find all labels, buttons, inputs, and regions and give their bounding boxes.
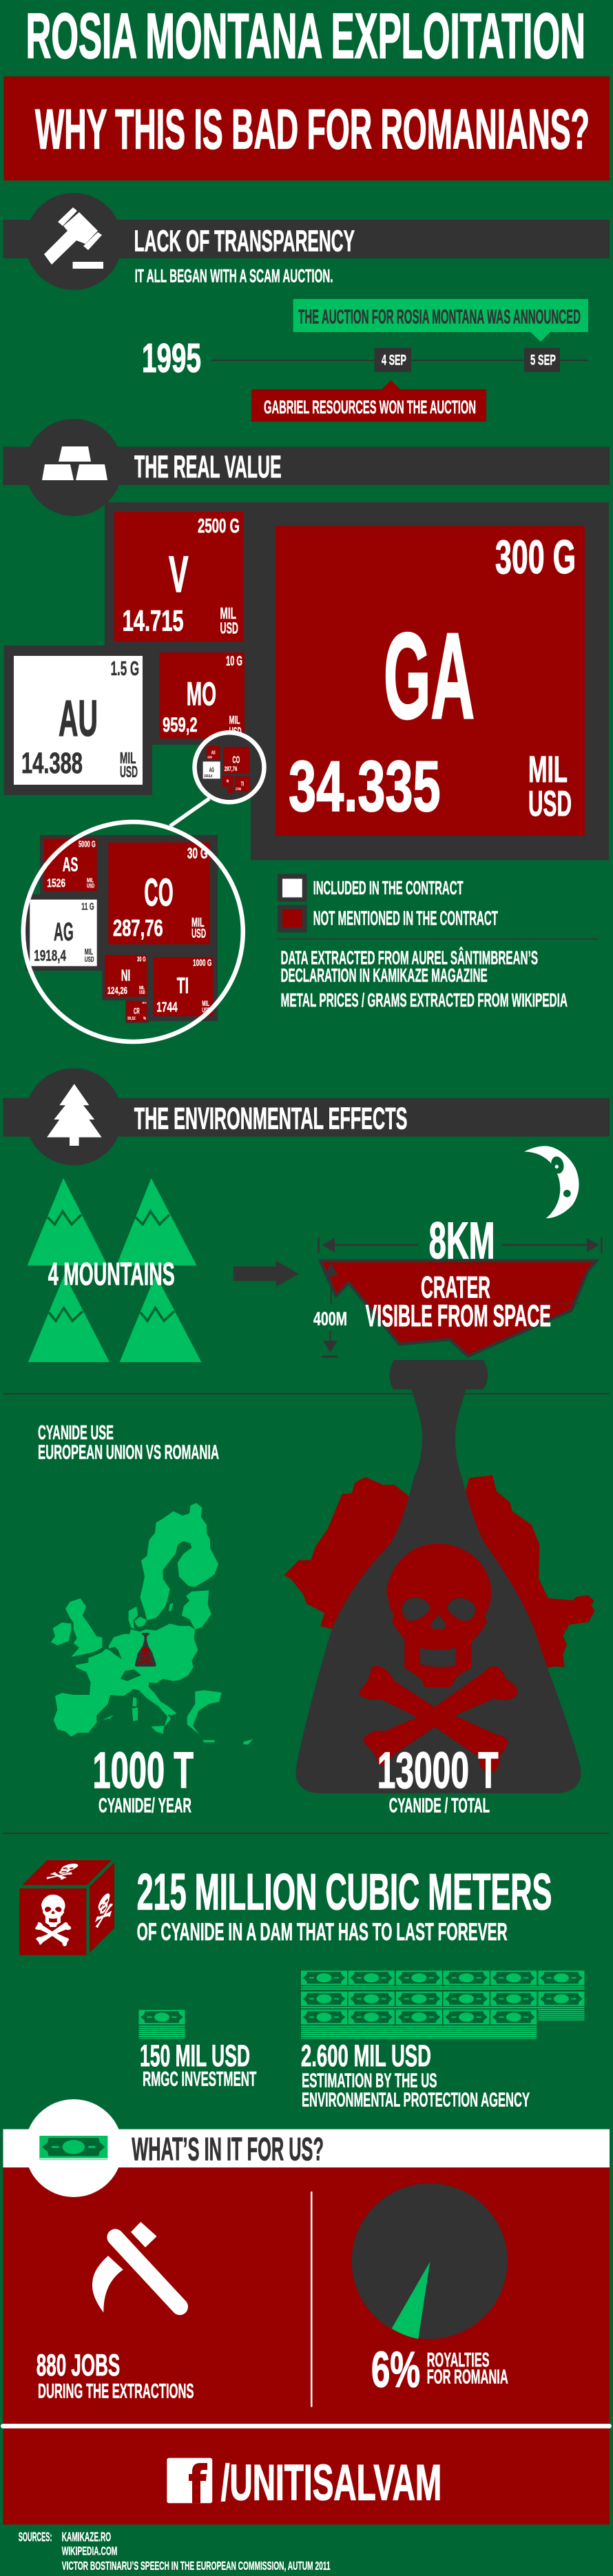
section header: the real value: THE REAL VALUE	[134, 449, 282, 484]
stat: 2.600 mil usd: ESTIMATION BY THE US	[302, 2070, 437, 2092]
date: 4 sep	[375, 348, 411, 372]
stat: 1000 t: CYANIDE/ YEAR	[98, 1795, 191, 1817]
stat: 150 mil usd	[140, 2039, 256, 2091]
dark backing panels for metal tiles	[4, 502, 609, 860]
stat: 1000 t	[92, 1742, 194, 1817]
callout: gabriel resources	[251, 380, 486, 422]
sources: KAMIKAZE.RO	[62, 2529, 111, 2544]
tile: AU	[14, 656, 143, 785]
tile: TI: TI	[177, 973, 189, 998]
miniature tiles: 1526	[207, 756, 212, 759]
subtitle: scam auction: IT ALL BEGAN WITH A SCAM AUCTION.	[135, 266, 333, 287]
stat: 6% royalties: ROYALTIES	[427, 2349, 489, 2371]
miniature tiles: AG	[209, 767, 214, 774]
section header: lack of transparency: LACK OF TRANSPARENCY	[134, 225, 355, 258]
tile: AS: MIL	[87, 877, 94, 884]
tile: AG: MIL	[85, 948, 93, 957]
date: 5 sep	[524, 348, 560, 372]
tile: GA: USD	[528, 784, 572, 824]
tile: MO: USD	[229, 725, 242, 738]
section header: environmental effects	[3, 1068, 610, 1166]
heading: 215 million cubic meters	[137, 1864, 552, 1946]
stat: 6% royalties	[371, 2341, 508, 2398]
heading: cyanide use	[38, 1422, 219, 1463]
connector line	[170, 798, 209, 826]
tile: NI: NI	[121, 966, 130, 984]
tile: NI: 124,26	[107, 985, 127, 996]
stat: 2.600 mil usd	[301, 2039, 530, 2111]
tile: V: 2500 G	[198, 515, 240, 537]
stat: 13000 t	[377, 1742, 499, 1817]
stat: 1000 t: 1000 T	[92, 1742, 194, 1799]
tile: AG: USD	[85, 956, 94, 964]
crater	[320, 1261, 596, 1356]
tile: MO: MIL	[229, 714, 240, 726]
tile: MO: 10 G	[226, 654, 242, 669]
section header: what's in it for us	[3, 2099, 610, 2197]
tile: AG: 1918,4	[34, 947, 67, 964]
tile: NI: MIL	[139, 986, 145, 991]
stat: 150 mil usd: RMGC INVESTMENT	[143, 2068, 256, 2091]
miniature tiles: TI	[241, 781, 244, 787]
sources: WIKIPEDIA.COM	[62, 2544, 117, 2557]
mountain 1	[28, 1178, 107, 1266]
icon: banknote	[39, 2136, 107, 2160]
timeline	[142, 299, 588, 422]
heading: cyanide use: EUROPEAN UNION VS ROMANIA	[38, 1441, 219, 1463]
mountain 2	[116, 1178, 197, 1266]
cube side skull	[95, 1887, 113, 1931]
tile: GA: 34.335	[289, 747, 441, 827]
section header: environmental effects: THE ENVIRONMENTAL EFFECTS	[134, 1102, 407, 1135]
sources: SOURCES:	[19, 2529, 52, 2544]
panel: what's in it for us	[3, 2167, 610, 2524]
tile: CR: 30,52	[127, 1016, 136, 1021]
icon: toxic cube	[19, 1860, 114, 1955]
money stack: rmgc investment	[139, 2010, 185, 2039]
legend: not mentioned	[278, 905, 498, 932]
section header: lack of transparency	[3, 193, 610, 290]
romania map	[284, 1475, 595, 1688]
section header: the real value	[3, 419, 610, 516]
stat: 150 mil usd: 150 MIL USD	[140, 2039, 250, 2073]
tile: AS: 5000 G	[79, 839, 96, 849]
crater width dimension 8km	[318, 1212, 601, 1270]
tile: MO	[160, 652, 245, 739]
tile: CO: 287,76	[113, 915, 163, 941]
four mountains	[28, 1178, 201, 1362]
legend	[278, 874, 598, 1011]
tile: V: USD	[220, 619, 238, 637]
tile: CO	[108, 843, 210, 945]
stat: 6% royalties: FOR ROMANIA	[427, 2367, 508, 2389]
stat: 13000 t: 13000 T	[377, 1742, 499, 1799]
icon: gold bars	[42, 446, 107, 480]
tile: CR: CR	[134, 1007, 140, 1016]
stat: 880 jobs: 880 JOBS	[37, 2348, 120, 2382]
tile: CO: USD	[191, 927, 206, 940]
tile: AG: 11 G	[81, 902, 94, 913]
facebook call to action: /UNITISALVAM	[221, 2454, 441, 2511]
data source note	[281, 947, 568, 1011]
magnified panel of small metals	[23, 822, 243, 1042]
tile: V: MIL	[220, 604, 236, 622]
cube front skull	[35, 1895, 71, 1946]
tile: AU: AU	[59, 690, 98, 747]
tile: MO: MO	[187, 677, 216, 712]
tile: AG	[30, 900, 97, 966]
tile: AU: MIL	[120, 749, 136, 767]
date: 5 sep: 5 SEP	[530, 353, 556, 368]
magnifier ring	[23, 822, 243, 1042]
tile: V: 14.715	[123, 605, 184, 638]
tile: TI: 1000 G	[193, 958, 211, 968]
tile: MO: 959,2	[163, 714, 198, 736]
tile: GA: GA	[384, 608, 475, 744]
tile: AU: 14.388	[21, 747, 83, 780]
stat: 880 jobs: DURING THE EXTRACTIONS	[38, 2380, 194, 2403]
tile: TI	[154, 957, 213, 1016]
miniature tiles: NI	[227, 780, 229, 784]
tile: AS: 1526	[47, 876, 65, 889]
tile: TI: USD	[202, 1007, 210, 1014]
tile: NI	[105, 955, 147, 997]
arrow	[233, 1261, 299, 1287]
money stacks: epa estimation	[301, 1970, 584, 2039]
mini bottle on eu map	[135, 1633, 156, 1667]
icon: facebook	[167, 2458, 212, 2503]
stat: 880 jobs	[37, 2348, 194, 2403]
year 1995: 1995	[142, 335, 201, 381]
tile: AG: AG	[54, 918, 74, 946]
heading: cyanide use: CYANIDE USE	[38, 1422, 114, 1444]
tile: AS	[44, 838, 97, 891]
crater depth dimension 400m	[313, 1263, 347, 1358]
facebook call to action	[167, 2454, 441, 2511]
miniature tiles: AS	[211, 750, 216, 756]
tile: V: V	[169, 546, 189, 603]
tile: GA: MIL	[528, 749, 568, 790]
pie chart: royalties	[352, 2183, 508, 2339]
icon: gavel	[44, 207, 103, 269]
miniature tiles: CO	[232, 755, 240, 766]
icon: moon	[524, 1146, 579, 1218]
skull and crossbones	[360, 1544, 517, 1773]
stat: 2.600 mil usd: 2.600 MIL USD	[301, 2039, 431, 2073]
section header: what's in it for us: WHAT’S IN IT FOR US?	[132, 2130, 324, 2167]
small magnifier circle with miniature tiles	[194, 732, 264, 802]
tile: CO: CO	[144, 870, 174, 914]
crater: CRATER	[421, 1270, 490, 1304]
miniature tiles	[203, 746, 250, 793]
tile: AU: USD	[120, 763, 138, 781]
map: european union	[51, 1503, 253, 1744]
sources: VICTOR BOSTINARU’S SPEECH IN THE EUROPEAN COMMISSION, AUTUM 2011	[62, 2559, 331, 2573]
crater depth dimension 400m: 400M	[313, 1308, 347, 1329]
tile: NI: USD	[139, 989, 145, 996]
legend: included	[278, 874, 464, 902]
sources	[19, 2529, 331, 2573]
icon: pickaxe	[92, 2222, 180, 2313]
tile: CO: 30 G	[187, 845, 208, 862]
tile: GA	[276, 526, 585, 836]
crater width dimension 8km: 8KM	[429, 1212, 495, 1270]
date: 4 sep: 4 SEP	[382, 353, 406, 368]
tile: TI: MIL	[202, 1000, 209, 1008]
poison bottle	[295, 1360, 581, 1793]
tile: CO: MIL	[191, 915, 205, 929]
tile: NI: 30 G	[137, 956, 146, 963]
miniature tiles: 1744	[236, 787, 241, 792]
tile: AS: AS	[63, 854, 78, 876]
miniature tiles: 287,76	[225, 765, 238, 772]
legend: included: INCLUDED IN THE CONTRACT	[313, 877, 464, 898]
tile: AU: 1.5 G	[111, 658, 139, 680]
tile: CR: 50 G	[143, 1001, 147, 1004]
stat: 13000 t: CYANIDE / TOTAL	[389, 1795, 490, 1817]
tile: CR	[126, 1001, 147, 1021]
callout: auction announced	[293, 299, 588, 342]
miniature tiles: 1918,4	[204, 774, 213, 779]
mountain 4	[120, 1275, 201, 1362]
tile: V	[114, 512, 243, 641]
icon: pine tree	[47, 1084, 102, 1146]
mountain 3	[28, 1275, 110, 1362]
stat: 6% royalties: 6%	[371, 2341, 420, 2398]
cube top skull	[43, 1864, 85, 1879]
tile: AS: USD	[87, 883, 94, 889]
tile: CR: %	[143, 1017, 146, 1021]
tile: TI: 1744	[156, 1000, 178, 1015]
label: 4 mountains: 4 MOUNTAINS	[48, 1256, 175, 1292]
banner: why this is bad	[4, 76, 610, 181]
